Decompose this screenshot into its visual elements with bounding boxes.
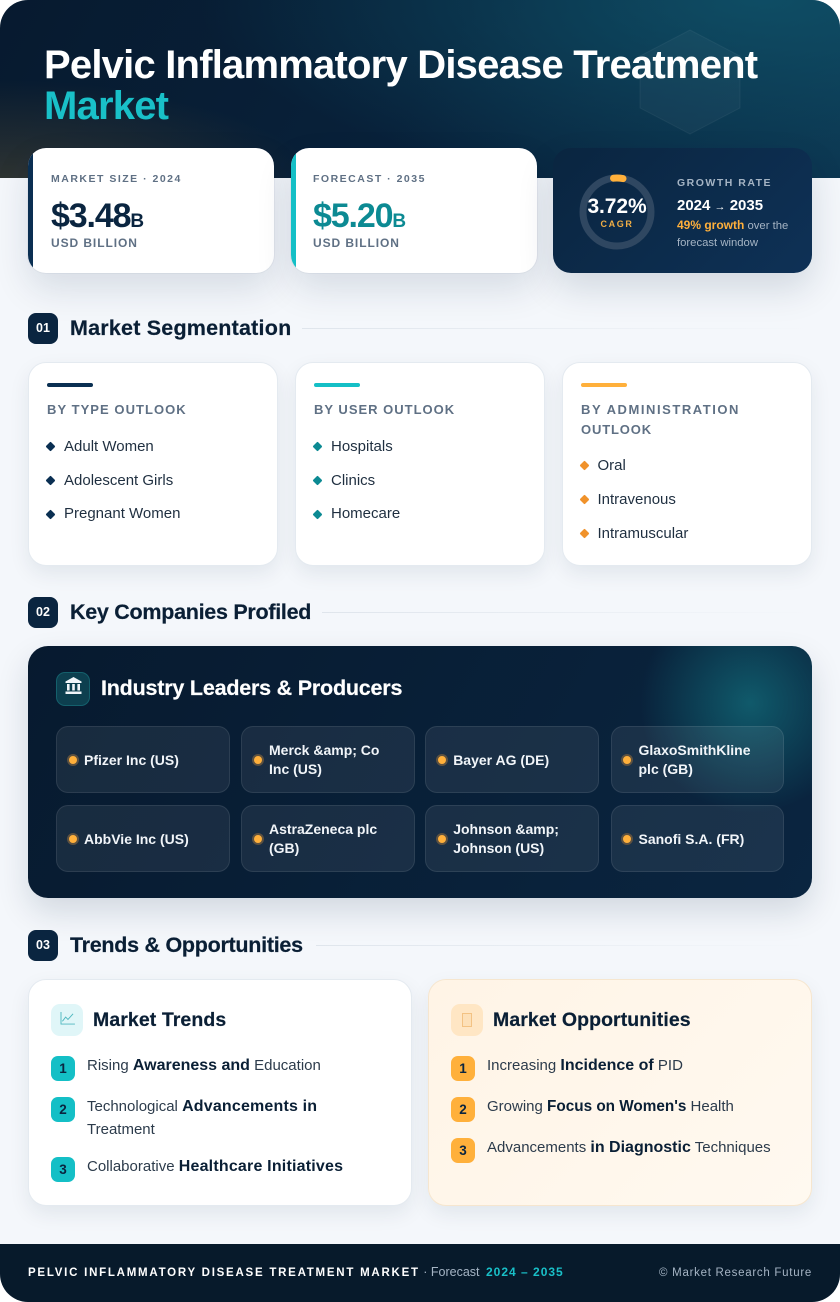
section heading 02 [28,597,624,628]
footer: © Market Research Future [659,1267,812,1279]
panel: by administration outlook: OUTLOOK [581,422,652,436]
icon: decorative hexagon [640,30,740,134]
card heading: Market Trends [93,1009,226,1031]
icon: chart [51,1004,83,1036]
panel: market trends: 3 [59,1162,67,1177]
panel: market trends [28,979,412,1206]
section heading 03: Trends & Opportunities [70,933,303,957]
card heading: Market Opportunities [493,1009,691,1031]
chart: CAGR donut [580,174,654,250]
panel: market trends: Rising Awareness and Education [87,1057,321,1074]
panel: by user outlook: Homecare [331,505,400,522]
section heading 02: 02 [36,605,50,619]
stat card: forecast: FORECAST · 2035 [313,173,426,185]
company chip: Inc (US) [269,761,322,777]
stat card: forecast: $5.20B [313,197,406,235]
company chip [56,726,230,793]
section heading 01: 01 [36,321,50,335]
panel: by user outlook: BY USER OUTLOOK [314,402,455,417]
title [44,43,758,128]
company chip: Sanofi S.A. (FR) [638,830,744,846]
stat card: growth rate: CAGR [601,219,633,229]
section heading 03: 03 [36,938,50,952]
company chip [610,726,784,793]
company chip: Bayer AG (DE) [453,752,549,768]
stat card: growth rate: 2024 → 2035 [677,197,763,214]
panel: market opportunities: Advancements in Diagnostic Techniques [487,1139,771,1156]
icon: placeholder glyph [451,1004,483,1036]
panel: market opportunities: 1 [459,1061,467,1076]
stat card: market size: MARKET SIZE · 2024 [51,173,182,185]
company chip [241,805,414,872]
panel: by user outlook: Clinics [331,472,375,489]
panel: by type outlook [28,362,278,566]
panel: market opportunities: 3 [459,1143,467,1158]
panel: market trends: Technological Advancements in [87,1098,317,1115]
section heading 02: Key Companies Profiled [70,600,311,624]
stat card: forecast [291,148,537,273]
panel: market opportunities: Increasing Incidence of PID [487,1057,683,1074]
company chip: GlaxoSmithKline [638,742,751,758]
panel: by administration outlook: BY ADMINISTRATION [581,402,740,417]
panel: industry leaders [28,646,812,898]
company chip: Pfizer Inc (US) [84,752,179,768]
panel: market trends: Collaborative Healthcare Initiatives [87,1158,343,1175]
title: Pelvic Inflammatory Disease Treatment [44,43,757,87]
stat card: market size [28,148,274,273]
panel: market trends: Treatment [87,1120,155,1138]
panel: market opportunities: 2 [459,1102,467,1117]
company chip [425,726,599,793]
stat card: growth rate: 3.72% [587,195,647,218]
company chip [56,805,230,872]
panel: market trends: 2 [59,1102,67,1117]
company chip: AbbVie Inc (US) [84,830,189,846]
panel: by user outlook [295,362,545,566]
panel: market trends: 1 [59,1061,67,1076]
panel: by administration outlook: Oral [598,457,626,474]
company chip: AstraZeneca plc (GB) [269,821,377,856]
stat card: growth rate [553,148,812,273]
section heading 01 [28,313,616,344]
panel: market opportunities: Growing Focus on Women's Health [487,1098,734,1115]
company chip [241,726,414,793]
stat card: market size: USD BILLION [51,236,138,250]
stat card: forecast: USD BILLION [313,236,400,250]
company chip: Merck &amp; Co [269,742,379,758]
section heading 01: Market Segmentation [70,316,291,340]
panel: by type outlook: Adult Women [64,438,154,455]
company chip: plc (GB) [638,761,693,777]
panel: by type outlook: Pregnant Women [64,505,180,522]
footer: PELVIC INFLAMMATORY DISEASE TREATMENT MARKET · Forecast 2024 – 2035 [28,1265,564,1279]
panel: market opportunities [428,979,812,1206]
stat card: growth rate: 49% growth over the [677,218,788,232]
panel: by administration outlook: Intramuscular [598,525,688,542]
icon: bank [56,672,90,706]
company chip: Johnson &amp; Johnson (US) [453,821,559,856]
panel: by administration outlook [562,362,812,566]
panel: by type outlook: BY TYPE OUTLOOK [47,402,187,417]
panel heading: Industry Leaders & Producers [101,676,402,700]
panel: by user outlook: Hospitals [331,438,393,455]
footer [0,1244,840,1302]
stat card: market size: $3.48B [51,197,144,235]
panel: by administration outlook: Intravenous [598,491,676,508]
title: Market [44,84,168,128]
company chip [610,805,784,872]
stat card: growth rate: forecast window [677,236,758,248]
panel: by type outlook: Adolescent Girls [64,472,173,489]
stat card: growth rate: GROWTH RATE [677,177,772,189]
header banner [0,0,840,178]
company chip [425,805,599,872]
section heading 03 [28,930,620,961]
